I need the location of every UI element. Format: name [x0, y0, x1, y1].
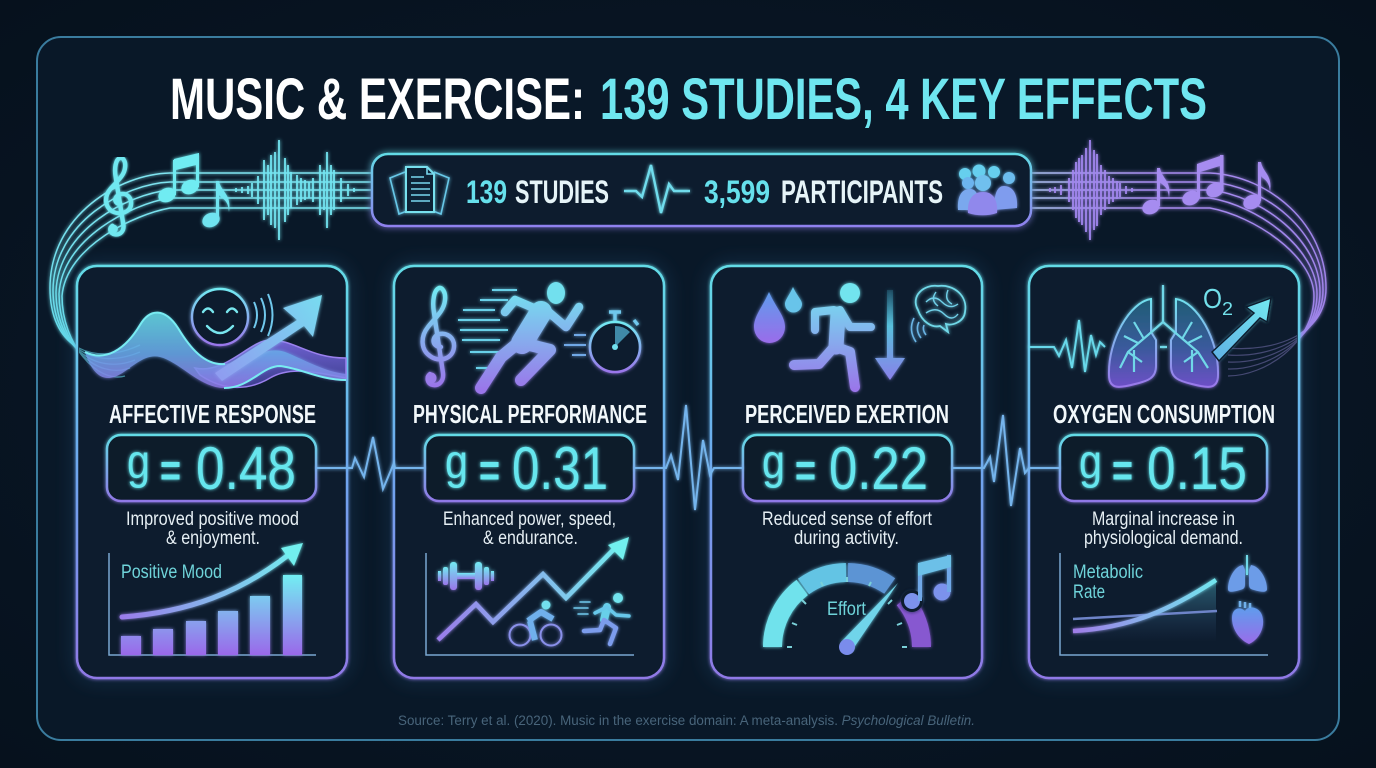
- effect size: [425, 435, 634, 502]
- effect size: =: [479, 444, 500, 496]
- panel: perceived exertion: [711, 266, 982, 678]
- chart: effort gauge: Effort: [827, 599, 867, 620]
- illustration: mood wave and arrow: [85, 289, 346, 388]
- effect size: 0.15: [1147, 435, 1247, 502]
- waveform: left: [236, 140, 354, 240]
- title: MUSIC & EXERCISE:: [170, 67, 585, 132]
- effect size: 0.31: [512, 435, 608, 502]
- heading: PERCEIVED EXERTION: [745, 399, 949, 429]
- description: Reduced sense of effort: [762, 509, 933, 530]
- staff lines entering panel: [79, 344, 140, 378]
- oxygen label: O: [1203, 283, 1222, 314]
- icon: heartbeat line: [624, 165, 690, 213]
- stat: participants: 3,599: [704, 174, 770, 210]
- illustration: drops runner arrow brain: [754, 283, 965, 387]
- chart: positive mood bars: Positive Mood: [121, 562, 222, 583]
- icon: heart: [1232, 601, 1263, 644]
- icon: dumbbell: [438, 562, 494, 590]
- illustration: lungs oxygen: [1029, 285, 1271, 387]
- effect size: g: [445, 436, 468, 489]
- icon: treble clef left: [106, 158, 131, 235]
- effect size: g: [762, 436, 785, 489]
- description: & enjoyment.: [166, 528, 260, 549]
- stat: studies: STUDIES: [515, 174, 609, 210]
- effect size: g: [127, 436, 150, 489]
- chart: effort gauge: [772, 555, 951, 655]
- stat bar: [372, 154, 1031, 226]
- panel halos: [77, 266, 1299, 678]
- heading: OXYGEN CONSUMPTION: [1053, 399, 1275, 429]
- icon: music note: [902, 555, 951, 610]
- effect size: [1060, 435, 1267, 502]
- icon: people: [958, 164, 1017, 215]
- icon: single note right 2: [1241, 162, 1271, 212]
- connector: heartbeat 3: [952, 415, 1060, 506]
- title: [170, 67, 1207, 132]
- description: Marginal increase in: [1092, 509, 1235, 530]
- effect size: g: [1079, 436, 1102, 489]
- heading: AFFECTIVE RESPONSE: [109, 399, 316, 429]
- description: Improved positive mood: [126, 509, 299, 530]
- source note: Source: Terry et al. (2020). Music in the exercise domain: A meta-analysis. Psychological Bulletin.: [398, 713, 975, 728]
- panel: affective response: [50, 266, 347, 678]
- stat: participants: [704, 174, 943, 210]
- effect size: =: [160, 444, 181, 496]
- chart: positive mood bars: [109, 543, 316, 655]
- icon: single note right 1: [1140, 168, 1170, 217]
- effect size: =: [1112, 444, 1133, 496]
- effect size: [107, 435, 316, 502]
- chart: metabolic rate: Rate: [1073, 582, 1105, 603]
- icon: beamed note right: [1180, 155, 1226, 208]
- description: [443, 509, 616, 549]
- description: & endurance.: [483, 528, 578, 549]
- stat: studies: 139: [466, 174, 507, 210]
- description: [126, 509, 299, 549]
- chart: metabolic rate: Metabolic: [1073, 562, 1143, 583]
- effect size: 0.48: [196, 435, 296, 502]
- heading: PHYSICAL PERFORMANCE: [413, 399, 647, 429]
- icon: beamed note left: [156, 153, 201, 205]
- icon: small runner: [574, 593, 629, 644]
- connector: heartbeat 2: [634, 405, 743, 510]
- effect size: [743, 435, 952, 502]
- effect size: 0.22: [829, 435, 928, 502]
- icon: single note left: [200, 181, 230, 230]
- icon: documents: [390, 167, 449, 214]
- waveform: right: [1050, 140, 1132, 240]
- music staff: left: [50, 173, 372, 377]
- chart: performance line: [426, 537, 634, 655]
- panel: oxygen consumption: [1029, 266, 1326, 678]
- illustration: clef runner stopwatch: [423, 282, 640, 388]
- icon: small lungs: [1228, 555, 1267, 592]
- description: [762, 509, 933, 549]
- icon: cyclist: [510, 600, 562, 646]
- oxygen label: 2: [1222, 299, 1233, 319]
- stat: participants: PARTICIPANTS: [781, 174, 943, 210]
- music staff: right: [1031, 173, 1326, 376]
- connector: heartbeat 1: [316, 437, 425, 489]
- description: physiological demand.: [1084, 528, 1243, 549]
- effect size: =: [795, 444, 816, 496]
- oxygen label: [1203, 283, 1233, 319]
- chart: metabolic rate: [1060, 553, 1268, 655]
- description: during activity.: [794, 528, 899, 549]
- staff lines entering panel: [1228, 335, 1297, 377]
- panel: physical performance: [394, 266, 664, 678]
- stat: studies: [466, 174, 609, 210]
- description: [1084, 509, 1243, 549]
- description: Enhanced power, speed,: [443, 509, 616, 530]
